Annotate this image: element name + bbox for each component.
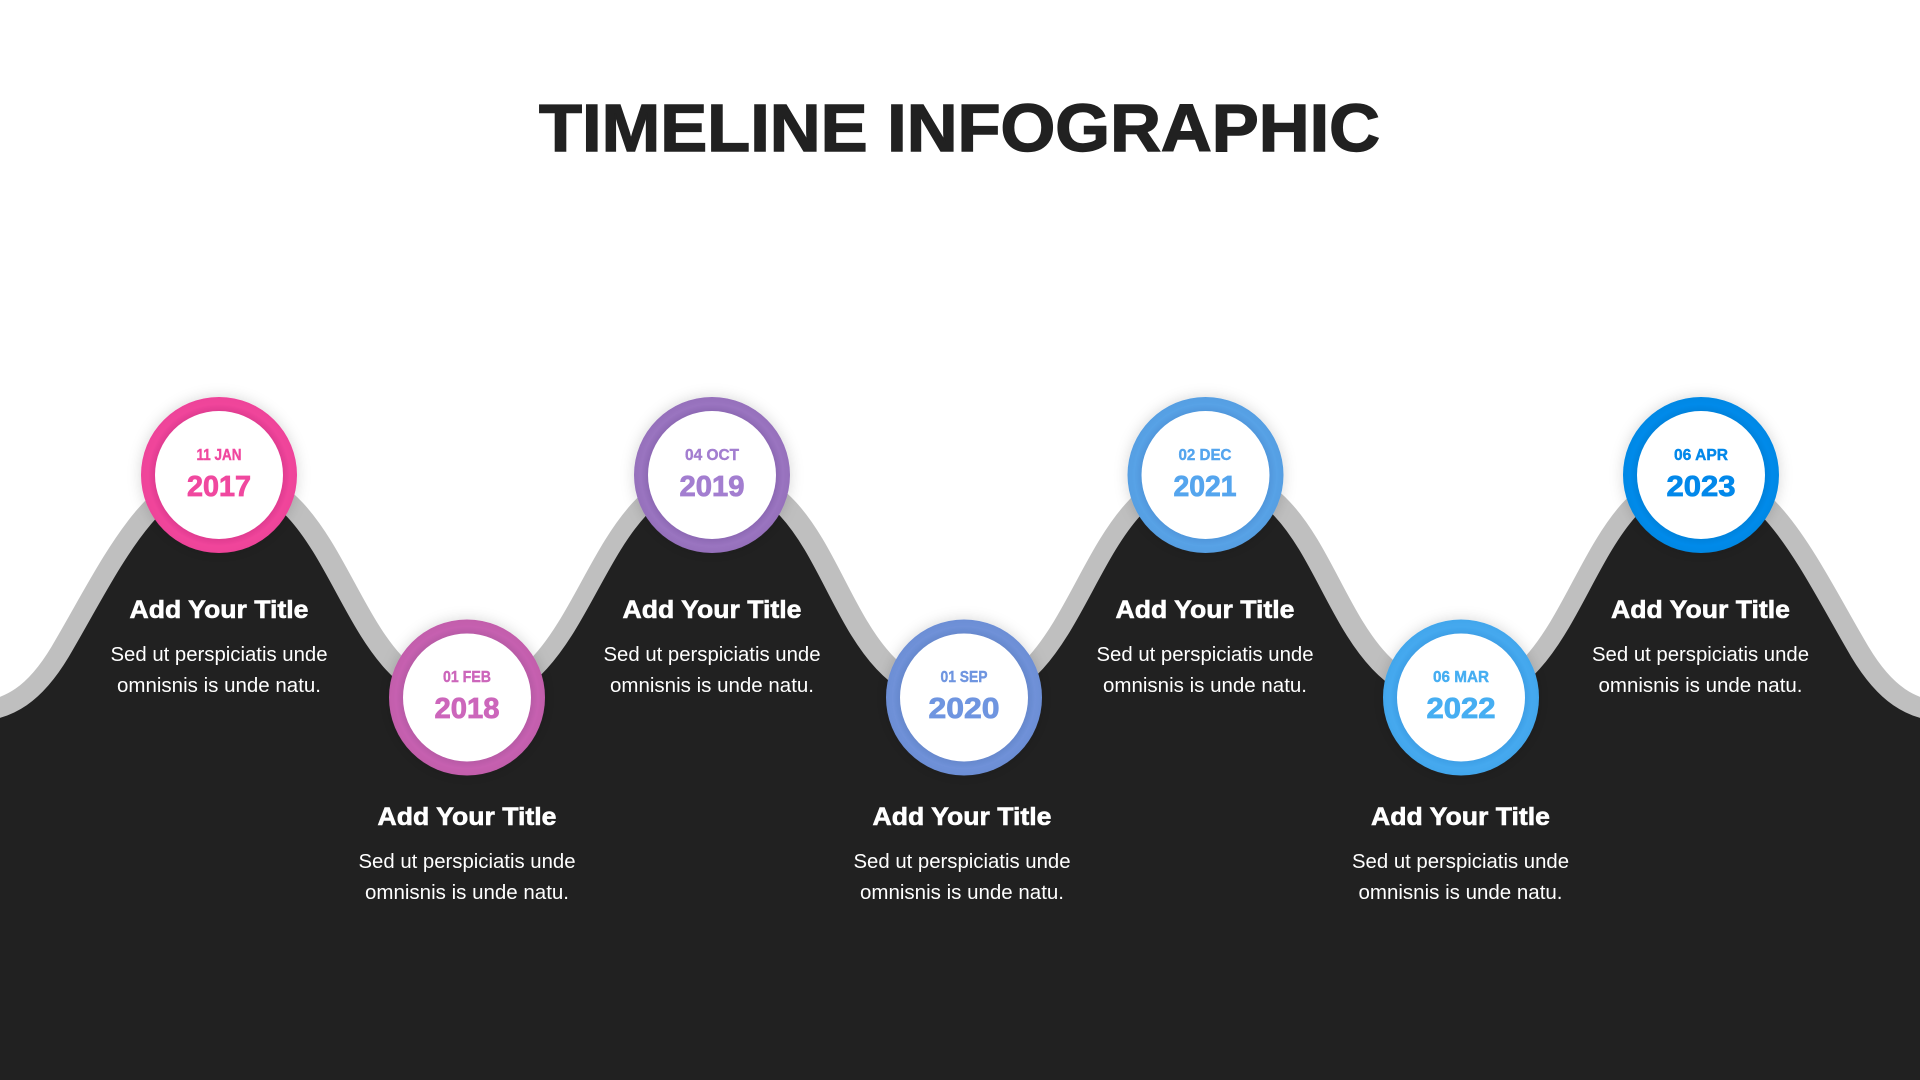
badge 2017: 11 JAN — [196, 447, 242, 464]
milestone 2021 — [1096, 397, 1314, 697]
title: TIMELINE INFOGRAPHIC — [539, 91, 1380, 166]
text block 2021: omnisnis is unde natu. — [1103, 675, 1307, 697]
text block 2021: Sed ut perspiciatis unde — [1096, 644, 1314, 666]
badge 2017: 2017 — [187, 471, 251, 503]
badge 2019 — [634, 397, 790, 553]
badge 2020: 01 SEP — [940, 669, 988, 686]
milestone 2023 — [1592, 397, 1809, 697]
text block 2018: Sed ut perspiciatis unde — [358, 851, 576, 873]
badge 2021 — [1128, 397, 1284, 553]
text block 2022: Add Your Title — [1371, 803, 1550, 831]
text block 2023: Sed ut perspiciatis unde — [1592, 644, 1809, 666]
dark mountain area — [0, 475, 1920, 1080]
text block 2017 — [110, 596, 328, 697]
text block 2019: Sed ut perspiciatis unde — [604, 644, 820, 666]
badge 2019: 04 OCT — [685, 447, 740, 464]
text block 2021: Add Your Title — [1116, 596, 1295, 624]
badge 2023: 06 APR — [1674, 447, 1728, 464]
text block 2018 — [358, 803, 576, 904]
grey wave line — [0, 475, 1920, 712]
badge 2023: 2023 — [1666, 471, 1736, 503]
milestone 2020 — [854, 620, 1070, 904]
text block 2018: Add Your Title — [378, 803, 557, 831]
text block 2023 — [1592, 596, 1809, 697]
badge 2018: 2018 — [434, 693, 500, 725]
text block 2020: omnisnis is unde natu. — [860, 882, 1064, 904]
text block 2018: omnisnis is unde natu. — [365, 882, 569, 904]
badge 2018 — [389, 620, 545, 776]
badge 2021: 2021 — [1174, 471, 1237, 503]
text block 2017: Add Your Title — [130, 596, 309, 624]
text block 2019: omnisnis is unde natu. — [610, 675, 814, 697]
text block 2019 — [604, 596, 820, 697]
badge 2023 — [1623, 397, 1779, 553]
badge 2019: 2019 — [680, 471, 744, 503]
text block 2022: omnisnis is unde natu. — [1358, 882, 1562, 904]
badge 2022: 2022 — [1426, 693, 1496, 725]
badge 2018: 01 FEB — [443, 669, 491, 686]
text block 2022: Sed ut perspiciatis unde — [1352, 851, 1569, 873]
badge 2021: 02 DEC — [1178, 447, 1232, 464]
badge 2022 — [1383, 620, 1539, 776]
milestone 2017 — [110, 397, 328, 697]
badge 2017 — [141, 397, 297, 553]
text block 2020 — [854, 803, 1070, 904]
text block 2020: Sed ut perspiciatis unde — [854, 851, 1070, 873]
text block 2017: Sed ut perspiciatis unde — [110, 644, 328, 666]
badge 2020 — [886, 620, 1042, 776]
milestone 2019 — [604, 397, 820, 697]
text block 2019: Add Your Title — [622, 596, 802, 624]
text block 2020: Add Your Title — [872, 803, 1052, 831]
text block 2022 — [1352, 803, 1569, 904]
milestone 2018 — [358, 620, 576, 904]
text block 2023: Add Your Title — [1611, 596, 1790, 624]
badge 2022: 06 MAR — [1433, 669, 1489, 686]
text block 2021 — [1096, 596, 1314, 697]
text block 2017: omnisnis is unde natu. — [117, 675, 321, 697]
milestone 2022 — [1352, 620, 1569, 904]
text block 2023: omnisnis is unde natu. — [1598, 675, 1802, 697]
badge 2020: 2020 — [928, 693, 1000, 725]
